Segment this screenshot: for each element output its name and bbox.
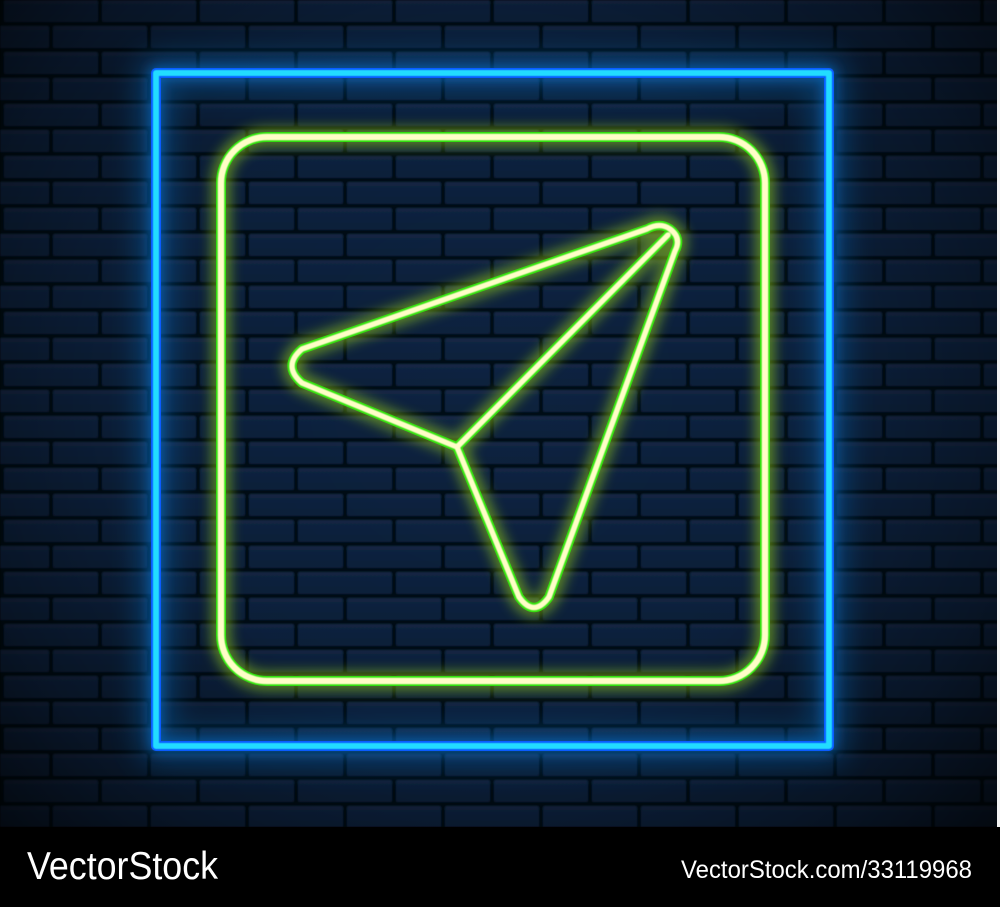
green neon rounded square (221, 137, 765, 681)
footer bar (0, 827, 1000, 907)
image reference URL: VectorStock.com/33119968 (681, 856, 972, 884)
icon: navigation arrow (292, 226, 678, 608)
blue neon square frame (156, 73, 829, 746)
brand wordmark: VectorStock (27, 845, 218, 888)
right edge white strip (997, 0, 1000, 827)
